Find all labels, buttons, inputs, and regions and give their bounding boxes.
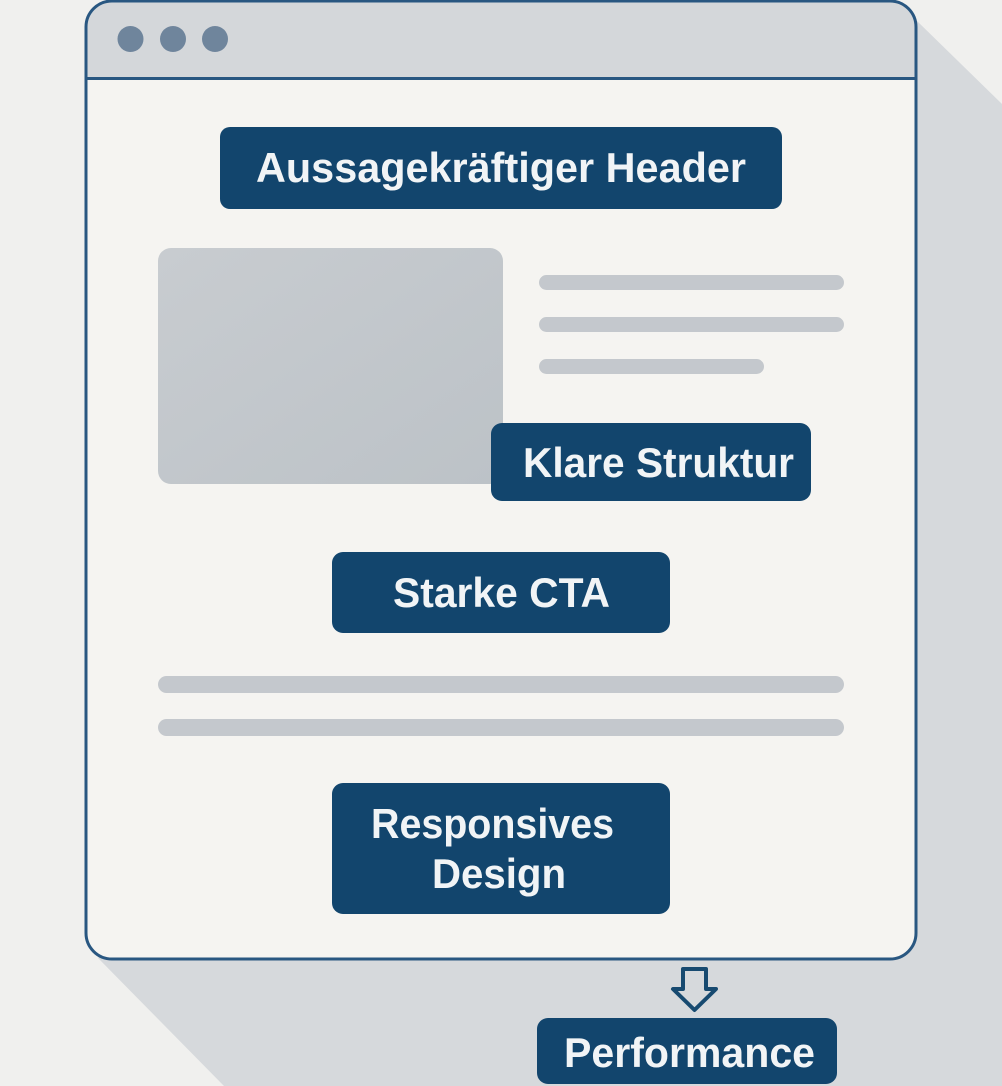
title bar divider <box>86 77 916 80</box>
CTA label: Starke CTA <box>393 569 610 616</box>
header label: Aussagekräftiger Header <box>256 144 746 191</box>
performance label <box>537 1018 837 1084</box>
performance label: Performance <box>564 1029 815 1076</box>
header label <box>220 127 782 209</box>
browser title bar <box>86 1 916 78</box>
window dots <box>118 26 228 52</box>
responsive design label <box>332 783 670 914</box>
window body <box>86 1 916 959</box>
responsive design label: Design <box>432 850 566 897</box>
image placeholder <box>158 248 503 484</box>
structure label <box>491 423 811 501</box>
browser window <box>86 1 916 959</box>
full width text lines <box>158 676 844 736</box>
responsive design label: Responsives <box>371 800 614 847</box>
icon: down arrow <box>673 969 716 1010</box>
window outline <box>86 1 916 959</box>
CTA label <box>332 552 670 633</box>
structure label: Klare Struktur <box>523 439 794 486</box>
text lines placeholder <box>539 275 844 374</box>
